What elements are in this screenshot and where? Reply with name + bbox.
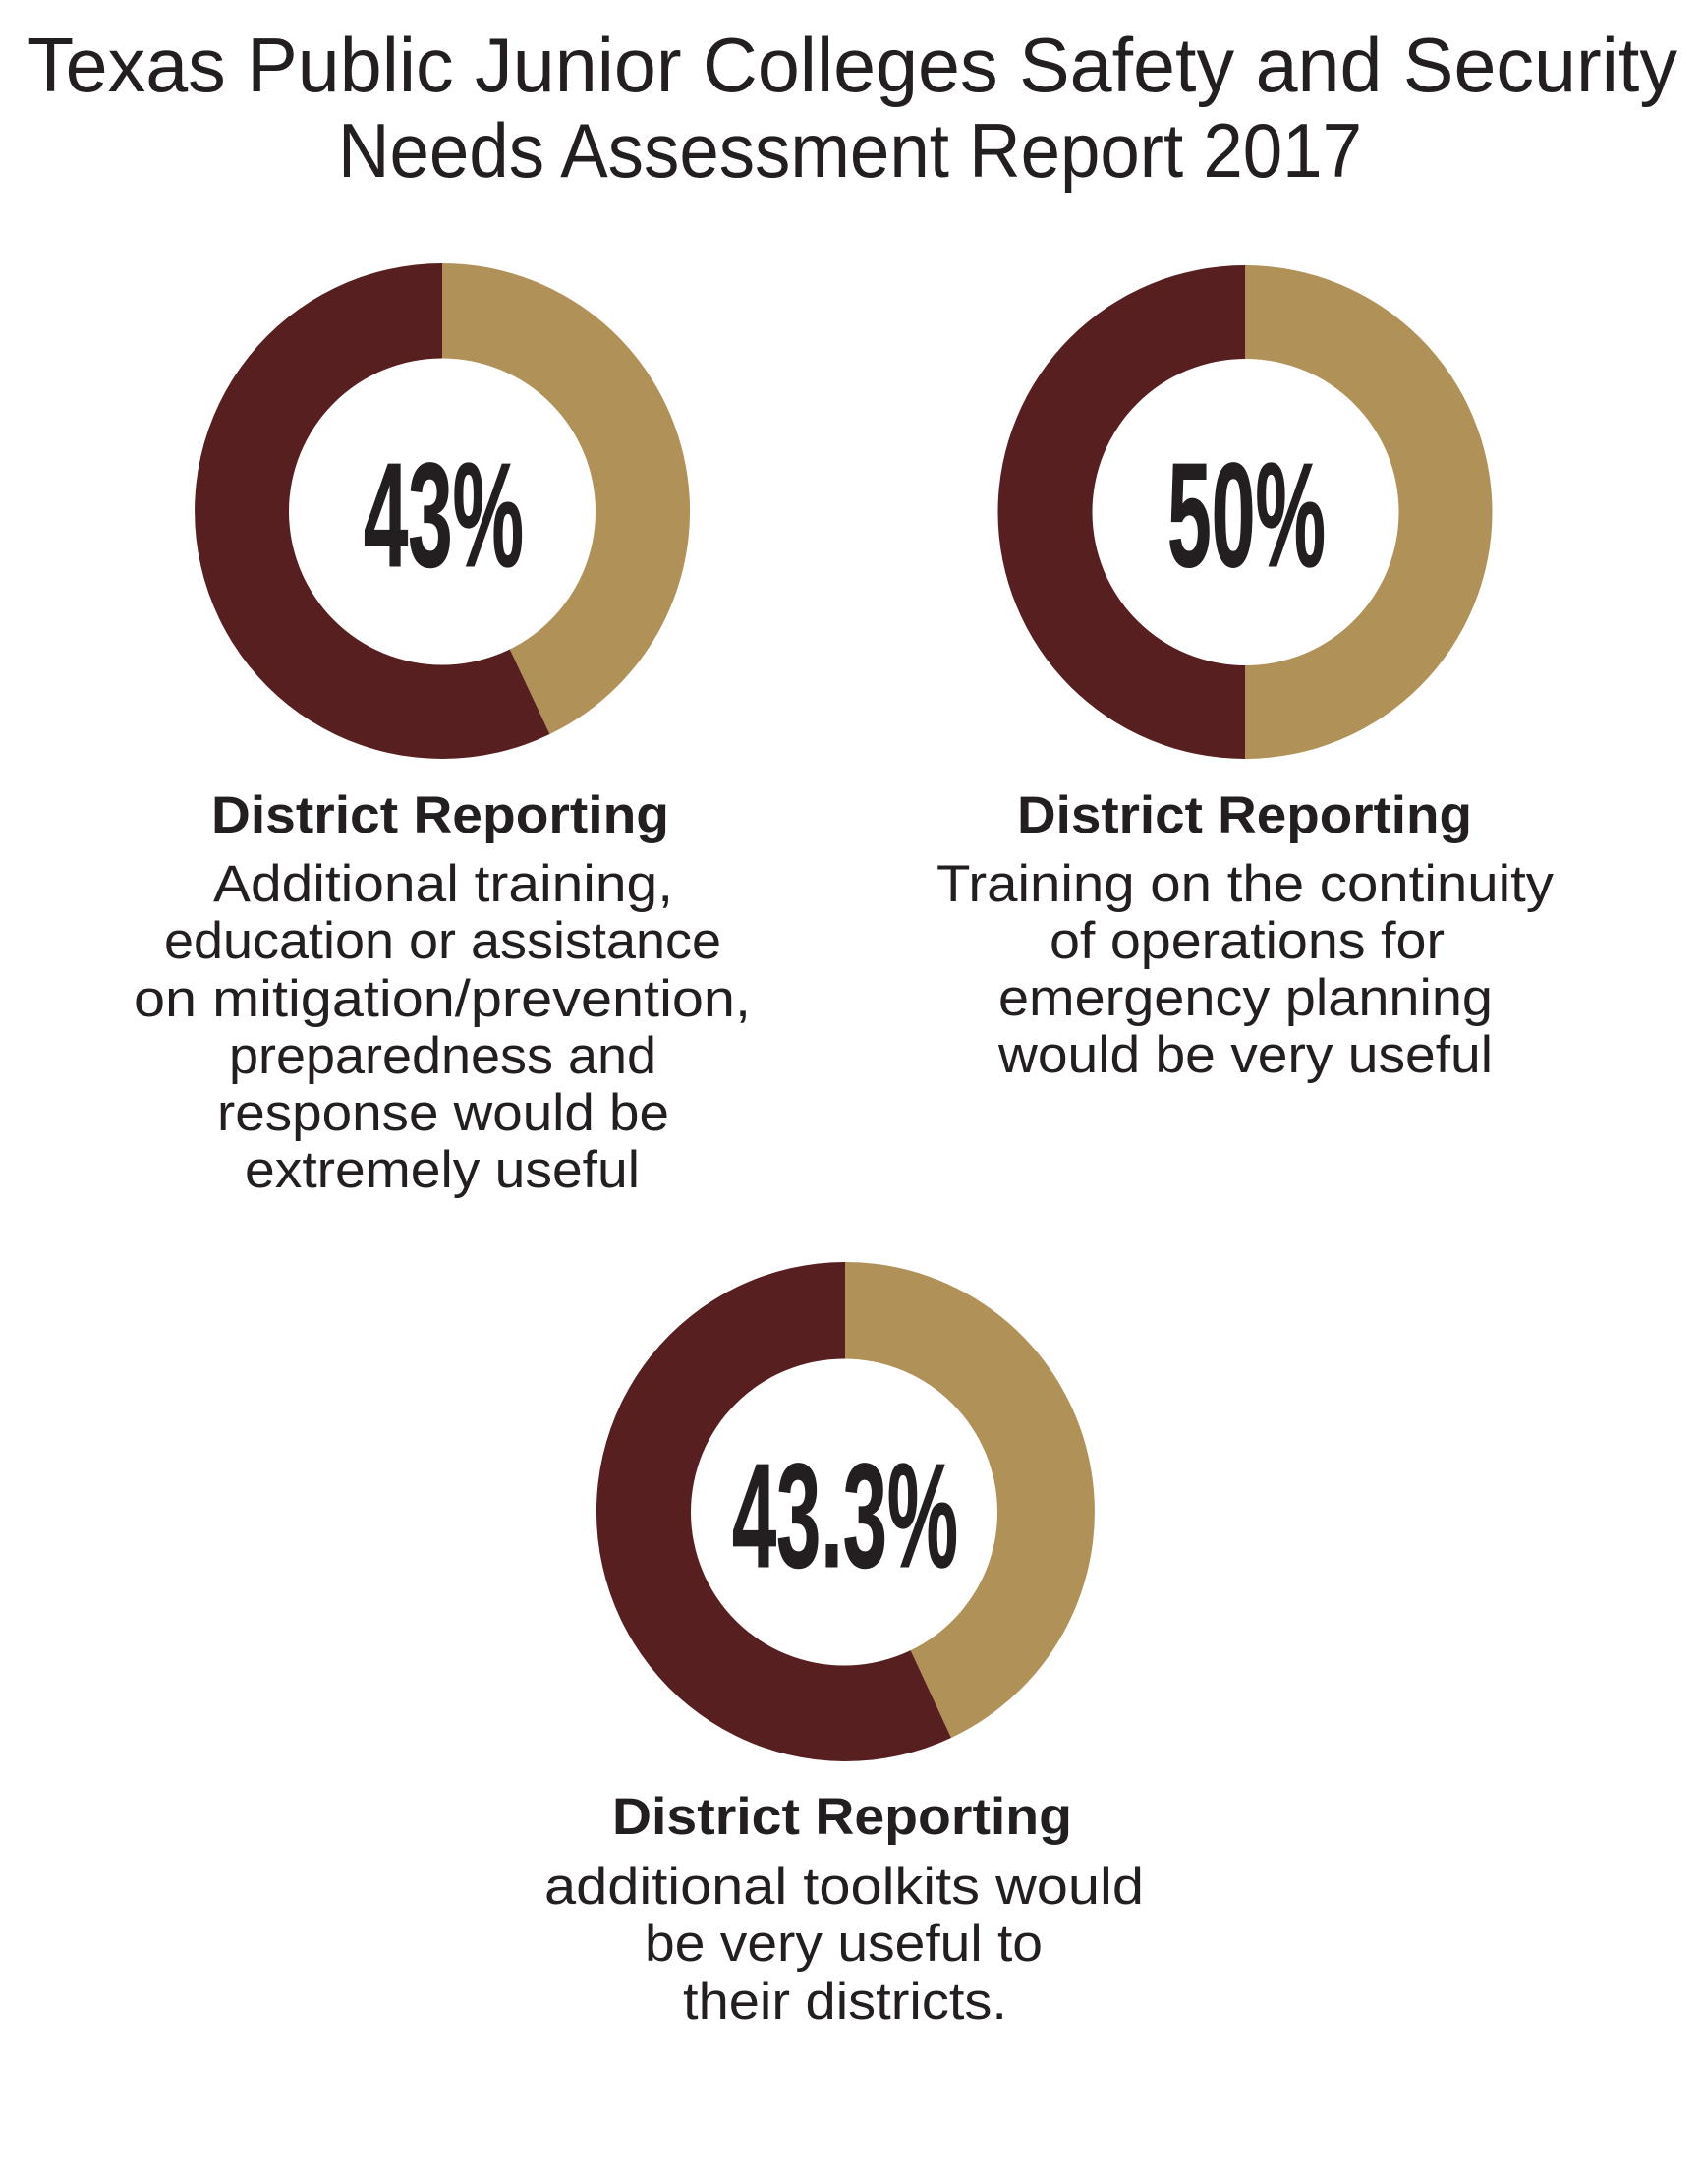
text block: continuity of operations description: emergency planning <box>998 969 1493 1027</box>
text block: continuity of operations description: would be very useful <box>997 1026 1493 1084</box>
panel: 43.3% additional toolkits <box>544 1262 1144 2031</box>
heading: district reporting: District Reporting <box>612 1788 1072 1846</box>
panel: 50% continuity of operations <box>936 265 1555 1084</box>
donut chart: 43.3% <box>596 1262 1095 1761</box>
panel: 43% additional training <box>134 263 751 1199</box>
title: Texas Public Junior Colleges Safety and Security <box>28 22 1677 108</box>
donut chart: 50%: 50% <box>1167 431 1326 598</box>
donut chart: 50% <box>997 265 1492 759</box>
text block: additional training description: education or assistance <box>164 912 721 970</box>
text block: additional training description: on mitigation/prevention, <box>134 970 751 1028</box>
text block: additional toolkits description: be very useful to <box>645 1915 1043 1973</box>
title <box>28 22 1677 194</box>
text block: additional toolkits description <box>544 1858 1144 2031</box>
text block: continuity of operations description <box>936 855 1555 1084</box>
text block: additional training description <box>134 855 751 1199</box>
heading: district reporting: District Reporting <box>1017 786 1472 844</box>
text block: additional training description: preparedness and <box>229 1027 656 1085</box>
title: Needs Assessment Report 2017 <box>338 107 1362 194</box>
text block: additional toolkits description: their districts. <box>683 1973 1007 2031</box>
text block: continuity of operations description: of operations for <box>1050 912 1445 970</box>
donut chart: 43%: 43% <box>364 431 524 598</box>
text block: additional training description: extremely useful <box>245 1141 640 1199</box>
text block: additional training description: Additional training, <box>213 855 673 913</box>
donut chart: 43% <box>195 263 690 759</box>
donut chart: 43.3%: 43.3% <box>732 1432 958 1598</box>
text block: additional training description: response would be <box>217 1084 669 1142</box>
heading: district reporting: District Reporting <box>211 786 669 844</box>
text block: continuity of operations description: Training on the continuity <box>936 855 1555 913</box>
text block: additional toolkits description: additional toolkits would <box>544 1858 1144 1916</box>
